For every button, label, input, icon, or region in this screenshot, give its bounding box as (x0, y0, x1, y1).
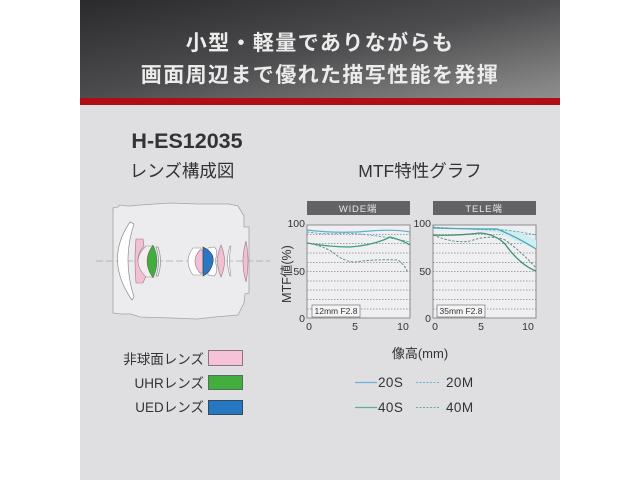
focal length label: 12mm F2.8 (314, 306, 358, 316)
header title (141, 31, 499, 87)
legend: UED: UEDレンズ (135, 400, 204, 415)
aspherical lens 2 (195, 250, 203, 273)
red rule (80, 98, 560, 105)
legend: 20M: 20M (446, 375, 473, 390)
curve 40M (433, 235, 536, 268)
curve 40S (433, 233, 536, 271)
x axis ticks (306, 321, 409, 333)
aspherical lens 1 (135, 239, 146, 283)
y axis ticks: 0 (299, 313, 305, 325)
x axis ticks (432, 321, 534, 333)
header title: 画面周辺まで優れた描写性能を発揮 (141, 64, 499, 87)
chart: MTF TELE (413, 201, 536, 333)
header band (80, 0, 560, 105)
focal length label: 35mm F2.8 (440, 306, 483, 316)
optical axis (96, 260, 270, 262)
chart: MTF WIDE (279, 201, 410, 333)
y axis ticks: 100 (287, 218, 305, 230)
header title: 小型・軽量でありながらも (186, 31, 454, 55)
y axis ticks: 50 (419, 266, 431, 278)
aspherical lens 3 (218, 245, 224, 277)
chart title bar: TELE端 (465, 203, 503, 215)
front group white lens (138, 246, 153, 277)
curve 20S (433, 228, 536, 249)
curve 20S (307, 230, 410, 232)
legend: lens types (123, 350, 242, 415)
y axis ticks: 100 (413, 218, 431, 230)
y axis title: MTF値(%) (279, 245, 294, 303)
UHR lens (147, 245, 157, 278)
heading: lens diagram: レンズ構成図 (130, 161, 234, 181)
x axis ticks: 5 (478, 321, 484, 333)
plot area (433, 225, 536, 318)
lens diagram (96, 203, 270, 319)
legend: 20S: 20S (378, 375, 403, 390)
y axis ticks: 50 (293, 266, 305, 278)
x axis title: 像高(mm) (392, 346, 448, 361)
y axis ticks (413, 218, 431, 325)
front lens (117, 222, 134, 300)
rear group white lens (188, 248, 201, 275)
x axis ticks: 10 (397, 321, 409, 333)
legend: MTF curves (355, 375, 473, 415)
lens barrel (113, 203, 249, 319)
white lenses right of UED (208, 247, 217, 276)
x axis ticks: 0 (306, 321, 312, 333)
thin meniscus lens (228, 246, 231, 276)
curve 20M (307, 232, 410, 242)
aspherical lens 4 (243, 241, 248, 282)
UED lens (203, 247, 213, 276)
curve 40M (307, 243, 408, 273)
heading: model name: H-ES12035 (131, 129, 243, 153)
y axis ticks: 0 (425, 313, 431, 325)
heading: MTF chart: MTF特性グラフ (358, 161, 482, 181)
x axis ticks: 0 (432, 321, 438, 333)
x axis ticks: 5 (352, 321, 358, 333)
legend: 40M: 40M (446, 400, 473, 415)
panel: background (80, 0, 560, 480)
plot area (307, 225, 410, 318)
legend: 40S: 40S (378, 400, 403, 415)
y axis ticks (287, 218, 305, 325)
curve 40S (307, 237, 410, 247)
curve 20M (433, 227, 536, 235)
white lens right of UHR (156, 247, 160, 276)
chart title bar: WIDE端 (339, 203, 377, 215)
shaded area between curves (433, 227, 536, 249)
legend: aspherical: 非球面レンズ (123, 352, 204, 367)
legend: UHR: UHRレンズ (135, 376, 204, 391)
x axis ticks: 10 (522, 321, 534, 333)
